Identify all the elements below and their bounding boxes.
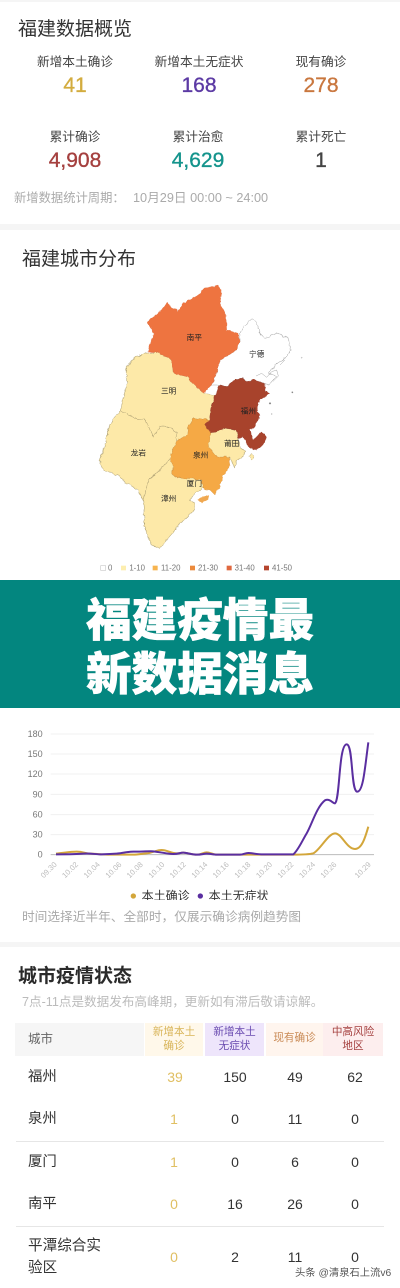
region: Putian island: [248, 454, 255, 460]
map labels: 龙岩: [131, 447, 146, 457]
map legend: 41-50: [272, 564, 293, 573]
header: new asymptomatic: [205, 1023, 264, 1056]
region: Fuzhou: [205, 378, 270, 450]
section divider: [0, 224, 400, 230]
header: new confirmed: 新增本土: [153, 1026, 195, 1038]
y axis labels: 60: [33, 810, 43, 820]
panel: Fujian data overview: 10月29日 00:00 ~ 24:00: [133, 191, 268, 205]
row: Xiamen: 厦门: [28, 1154, 57, 1170]
row: Xiamen: 1: [170, 1154, 178, 1170]
map legend: 1-10: [129, 564, 146, 573]
row: Nanping: 26: [287, 1196, 303, 1212]
header: risk areas: 中高风险: [332, 1026, 374, 1038]
region: Quanzhou island: [197, 496, 208, 503]
stat: total confirmed: [49, 130, 101, 172]
map legend: 31-40: [235, 564, 255, 573]
stat: total deaths: 1: [315, 149, 327, 172]
banner: headline: 新数据消息: [86, 638, 314, 704]
chart legend: [131, 888, 269, 903]
row: Fuzhou: 150: [223, 1069, 247, 1085]
series: local confirmed: [56, 827, 368, 855]
stat: total confirmed: 累计确诊: [50, 130, 100, 144]
x axis labels: 10.06: [103, 860, 123, 880]
map: Fujian cities: [98, 284, 302, 573]
row: Pingtan: 11: [288, 1249, 302, 1265]
row: Pingtan: 2: [231, 1249, 239, 1265]
stat: new asymptomatic: [155, 55, 243, 97]
row: Pingtan: 平潭综合实验区: [28, 1238, 101, 1276]
stat: current confirmed: 278: [303, 74, 339, 97]
row: Xiamen: [28, 1154, 359, 1170]
map labels: [131, 332, 265, 503]
y axis labels: 180: [28, 729, 43, 739]
watermark: 头条 @清泉石上流v6: [295, 1268, 391, 1279]
stat: new asymptomatic: 新增本土无症状: [155, 55, 243, 69]
x axis labels: 09.30: [39, 860, 59, 880]
row: Pingtan: 0: [351, 1249, 359, 1265]
x axis labels: 10.14: [189, 860, 210, 880]
chart: local cases trend: [28, 729, 374, 900]
header: new asymptomatic: 无症状: [219, 1040, 250, 1052]
note: statistics period: 新增数据统计周期：: [14, 191, 125, 205]
row: Quanzhou: 0: [351, 1111, 359, 1127]
note: statistics period: [14, 191, 268, 205]
header: new confirmed: [145, 1023, 203, 1056]
row: Pingtan: 0: [170, 1249, 178, 1265]
x axis labels: 10.12: [168, 860, 188, 880]
note: trend caption: 时间选择近半年、全部时，仅展示确诊病例趋势图: [22, 910, 301, 924]
row: Xiamen: 0: [231, 1154, 239, 1170]
top divider: [0, 0, 400, 2]
coastal islands: [256, 357, 302, 414]
stat: new asymptomatic: 168: [181, 74, 217, 97]
row: Nanping: 0: [351, 1196, 359, 1212]
row: Quanzhou: [28, 1110, 359, 1127]
row: Fuzhou: 39: [167, 1069, 183, 1085]
row: Nanping: 0: [170, 1196, 178, 1212]
row: Fuzhou: 福州: [28, 1069, 57, 1085]
region: Sanming: [121, 352, 215, 442]
map regions: [99, 285, 291, 548]
header: city: [15, 1023, 144, 1056]
header: current confirmed: 现有确诊: [273, 1032, 316, 1044]
series: local asymptomatic: [56, 742, 368, 855]
x axis labels: 10.22: [275, 860, 295, 880]
row: Quanzhou: 11: [288, 1111, 302, 1127]
banner: headline: [0, 580, 400, 708]
map labels: 漳州: [161, 493, 176, 503]
row: Nanping: [28, 1196, 359, 1212]
row: Fuzhou: [28, 1068, 363, 1085]
row: Fuzhou: 62: [347, 1069, 363, 1085]
row: Xiamen: 0: [351, 1154, 359, 1170]
row: Nanping: 16: [227, 1196, 243, 1212]
stat: current confirmed: 现有确诊: [296, 55, 346, 69]
stat: new local confirmed: 新增本土确诊: [37, 55, 113, 69]
map legend: 11-20: [161, 564, 181, 573]
row: Fuzhou: 49: [287, 1069, 303, 1085]
region: Ningde: [212, 320, 291, 387]
region: Putian: [208, 428, 246, 467]
x axis labels: 10.29: [353, 860, 373, 880]
stat: total deaths: [296, 130, 346, 172]
x axis labels: [39, 860, 373, 880]
stat: new local confirmed: [37, 55, 113, 97]
panel: Fujian data overview: [14, 19, 346, 205]
y axis labels: 120: [28, 769, 43, 779]
stat: total confirmed: 4,908: [49, 149, 101, 172]
map labels: 莆田: [224, 438, 239, 448]
note: update info: 7点-11点是数据发布高峰期，更新如有滞后敬请谅解。: [22, 995, 323, 1009]
row: Xiamen: 6: [291, 1154, 299, 1170]
y axis labels: 150: [28, 749, 43, 759]
region: Nanping: [148, 285, 240, 393]
map legend: 0: [108, 564, 113, 573]
x axis labels: 10.24: [297, 860, 318, 880]
table: city status: [15, 1023, 384, 1276]
header: risk areas: 地区: [342, 1040, 364, 1052]
stat: total cured: [172, 130, 224, 172]
header: current confirmed: [266, 1023, 323, 1056]
header: new confirmed: 确诊: [163, 1040, 185, 1052]
row: Quanzhou: 泉州: [28, 1111, 57, 1127]
map legend: 21-30: [198, 564, 219, 573]
stat: total deaths: 累计死亡: [296, 130, 346, 144]
row: Quanzhou: 0: [231, 1111, 239, 1127]
map labels: 宁德: [249, 349, 265, 359]
header: risk areas: [323, 1023, 383, 1056]
x axis labels: 10.26: [318, 860, 338, 880]
banner: headline: 福建疫情最: [86, 584, 314, 650]
x axis labels: 10.04: [82, 860, 102, 880]
header: new asymptomatic: 新增本土: [213, 1026, 256, 1038]
row: Pingtan: [28, 1237, 359, 1276]
x axis labels: 10.08: [125, 860, 145, 880]
y axis labels: 90: [33, 789, 43, 799]
section divider: [0, 942, 400, 947]
stat: current confirmed: [296, 55, 346, 97]
y axis labels: 30: [33, 830, 43, 840]
map labels: 厦门: [187, 478, 202, 488]
header: city: 城市: [28, 1032, 53, 1046]
x axis labels: 10.16: [211, 860, 231, 880]
region: Longyan: [99, 412, 177, 502]
map legend: [101, 564, 293, 573]
x axis labels: 10.02: [60, 860, 80, 880]
region: Quanzhou: [170, 418, 230, 495]
y axis labels: [28, 729, 43, 860]
heading: overview: 福建数据概览: [18, 19, 132, 40]
map labels: 三明: [161, 387, 177, 396]
row: Quanzhou: 1: [170, 1111, 178, 1127]
map labels: 福州: [241, 406, 256, 415]
row: Nanping: 南平: [28, 1196, 57, 1212]
stat: total cured: 累计治愈: [173, 130, 223, 144]
x axis labels: 10.10: [146, 860, 166, 880]
stat: new local confirmed: 41: [63, 74, 87, 97]
x axis labels: 10.20: [254, 860, 274, 880]
map labels: 泉州: [193, 450, 208, 460]
heading: city distribution: 福建城市分布: [22, 249, 136, 270]
x axis labels: 10.18: [232, 860, 252, 880]
region: Zhangzhou and Xiamen: [143, 458, 203, 548]
stat: total cured: 4,629: [172, 149, 224, 172]
map labels: 南平: [187, 332, 202, 342]
y axis labels: 0: [38, 850, 43, 860]
heading: city status: 城市疫情状态: [18, 966, 132, 987]
